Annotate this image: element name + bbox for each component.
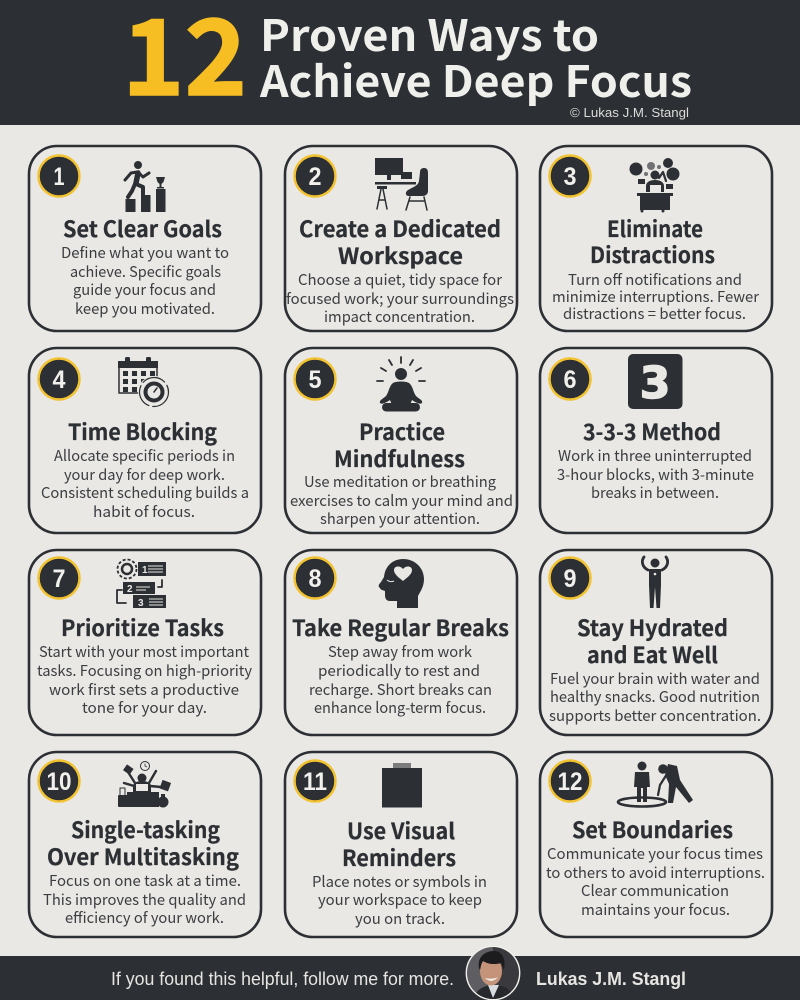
description: Use meditation or breathing [304,471,497,492]
badge 5 [294,358,336,400]
description: exercises to calm your mind and [290,490,513,511]
title [299,212,501,271]
icon: gear and numbered task list: 1 [142,565,148,576]
panel: 8 regular breaks [285,550,517,735]
description: keep you motivated. [75,298,215,319]
panel: 1 set clear goals [29,146,261,331]
description: minimize interruptions. Fewer [552,286,759,307]
copyright: © Lukas J.M. Stangl [570,105,689,120]
badge 11 [294,760,336,802]
call to action: If you found this helpful, follow me for more. [111,969,454,989]
description: This improves the quality and [43,889,246,910]
icon: sticky note [382,763,422,808]
description: tone for your day. [82,697,207,718]
title: Create a Dedicated [299,212,501,244]
panel: 11 visual reminders [285,752,517,937]
title text [259,2,692,110]
badge 9: 9 [564,565,576,593]
icon: distracted worker at desk [630,158,680,212]
footer bar [0,956,800,1000]
description: recharge. Short breaks can [309,679,492,700]
title text: Achieve Deep Focus [259,48,692,110]
badge 6: 6 [564,366,576,394]
description: Clear communication [581,880,729,901]
description: to others to avoid interruptions. [546,862,765,883]
badge 7 [38,558,80,598]
icon: climbing steps to trophy [125,161,166,212]
title [590,212,715,270]
badge 5: 5 [308,366,322,394]
description: Turn off notifications and [568,269,742,290]
description: Define what you want to [61,242,229,263]
icon: person drawing boundary circle [618,762,693,806]
description: your day for deep work. [64,464,225,485]
description [37,641,252,718]
icon: desk and chair [375,158,428,210]
author name: Lukas J.M. Stangl [536,969,686,989]
title: Practice [359,415,445,447]
panel: 12 set boundaries [540,752,772,937]
description: Step away from work [328,641,473,662]
badge 6 [550,358,590,400]
badge 11: 11 [303,768,327,796]
title: Use Visual [347,814,455,846]
badge 10: 10 [46,768,72,796]
description: Focus on one task at a time. [49,870,241,891]
title: and Eat Well [587,638,718,670]
description: impact concentration. [324,306,475,327]
title: Mindfulness [334,442,465,474]
title: Reminders [342,841,456,873]
title [334,415,465,474]
title: Set Boundaries [572,813,733,845]
icon: number three tile: 3 [640,358,670,409]
panel: 2 dedicated workspace [285,146,517,331]
title: Prioritize Tasks [61,611,224,643]
description: distractions = better focus. [563,303,746,324]
icon: multitasking worker [118,762,171,808]
description [546,843,765,920]
title: Workspace [338,239,463,271]
description: Start with your most important [39,641,249,662]
description: you on track. [355,908,445,929]
description: sharpen your attention. [320,508,480,529]
description: supports better concentration. [549,705,761,726]
description: Work in three uninterrupted [558,445,752,466]
badge 1: 1 [54,163,65,191]
description [552,269,759,324]
description: periodically to rest and [318,660,480,681]
badge 3 [550,156,590,196]
panel: 3 eliminate distractions [540,146,772,331]
description: guide your focus and [73,279,216,300]
description [43,870,246,928]
description: tasks. Focusing on high-priority [37,660,252,681]
panel: 9 hydrated and eat well [540,550,772,735]
badge 12: 12 [558,768,582,796]
badge 9 [550,558,590,598]
icon: gear and numbered task list: 3 [138,598,144,609]
description: healthy snacks. Good nutrition [550,686,760,707]
badge 2: 2 [308,163,322,191]
description: achieve. Specific goals [70,261,221,282]
badge 8: 8 [308,565,322,593]
icon: person arms raised [642,557,668,608]
title [47,813,239,872]
header banner [0,0,800,126]
description: enhance long-term focus. [314,697,486,718]
title: Set Clear Goals [63,212,222,244]
title [577,611,728,670]
badge 4 [38,358,80,400]
badge 12 [550,760,590,802]
badge 7: 7 [52,565,66,593]
title: Take Regular Breaks [292,611,509,643]
badge 2 [294,156,336,196]
description [549,668,761,726]
badge 8 [294,558,336,598]
description [41,445,249,522]
panel: 10 single-tasking [29,752,261,937]
icon: meditating person [377,357,425,412]
badge 1 [38,156,80,196]
description [312,871,487,929]
description: Consistent scheduling builds a [41,482,249,503]
icon: number three tile [628,354,682,409]
description: habit of focus. [93,501,195,522]
description: your workspace to keep [318,889,482,910]
description [286,269,514,327]
description: efficiency of your work. [65,907,224,928]
panel: 5 practice mindfulness [285,348,517,533]
description: Communicate your focus times [547,843,763,864]
icon: head with heart [379,559,424,608]
title [342,814,456,873]
title text: Proven Ways to [260,2,599,64]
title: Distractions [590,238,715,270]
description: Allocate specific periods in [54,445,235,466]
badge 4: 4 [52,366,66,394]
title: Time Blocking [68,415,217,447]
icon: calendar and gear [118,357,170,408]
panel: 6 3-3-3 method [540,348,772,533]
title: Over Multitasking [47,840,239,872]
title: Eliminate [607,212,703,244]
description: breaks in between. [591,482,719,503]
title: Stay Hydrated [577,611,728,643]
title: 3-3-3 Method [583,415,721,447]
description [309,641,492,718]
icon: gear and numbered task list: 2 [127,584,133,595]
description [290,471,513,529]
description: maintains your focus. [581,899,730,920]
badge 3: 3 [564,163,576,191]
description [61,242,229,319]
description: 3-hour blocks, with 3-minute [557,464,754,485]
description: Place notes or symbols in [312,871,487,892]
panel: 4 time blocking [29,348,261,533]
title: Single-tasking [71,813,220,845]
description: focused work; your surroundings [286,288,514,309]
description: Fuel your brain with water and [550,668,760,689]
description [557,445,754,503]
panel: 7 prioritize tasks [29,550,261,735]
author portrait [466,946,520,1000]
description: Choose a quiet, tidy space for [298,269,502,290]
badge 10 [38,760,80,802]
description: work first sets a productive [49,679,239,700]
icon: gear and numbered task list [117,560,166,609]
